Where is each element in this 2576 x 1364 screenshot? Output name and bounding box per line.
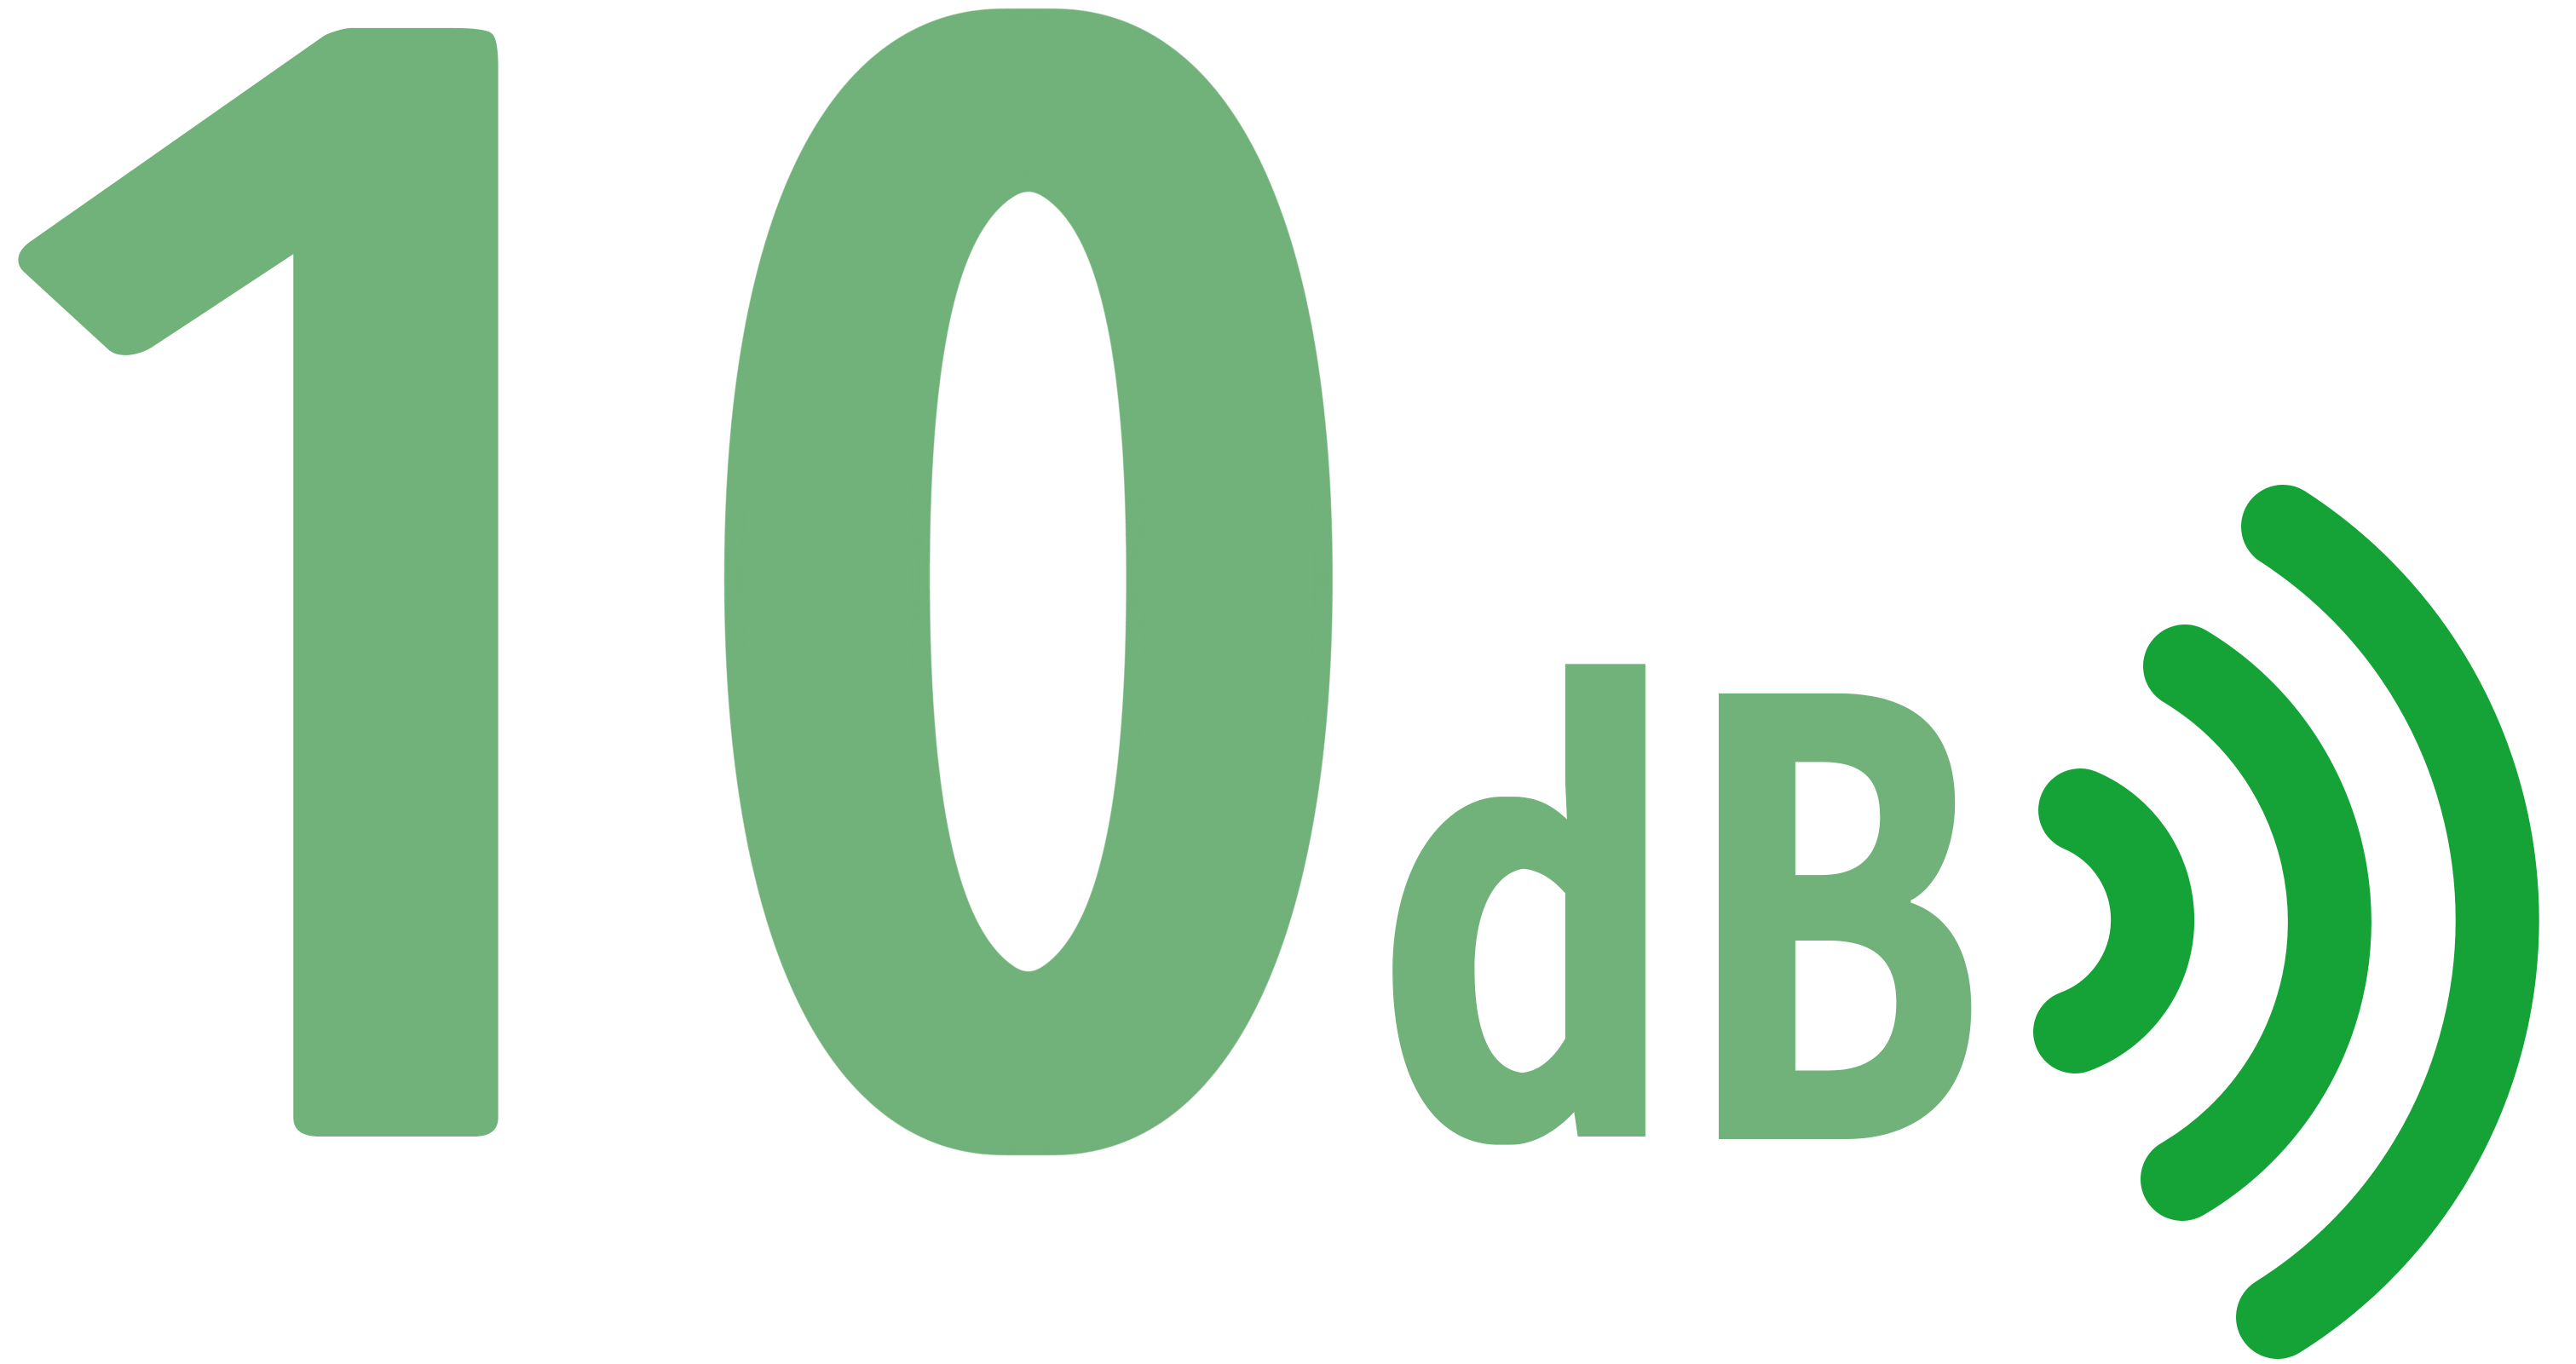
unit: dB: d (1377, 450, 1675, 1307)
unit: dB: B (1685, 441, 1983, 1313)
icon: sound waves (2075, 527, 2498, 1317)
unit: dB (1377, 441, 1983, 1313)
number: 10 (0, 0, 1356, 1364)
